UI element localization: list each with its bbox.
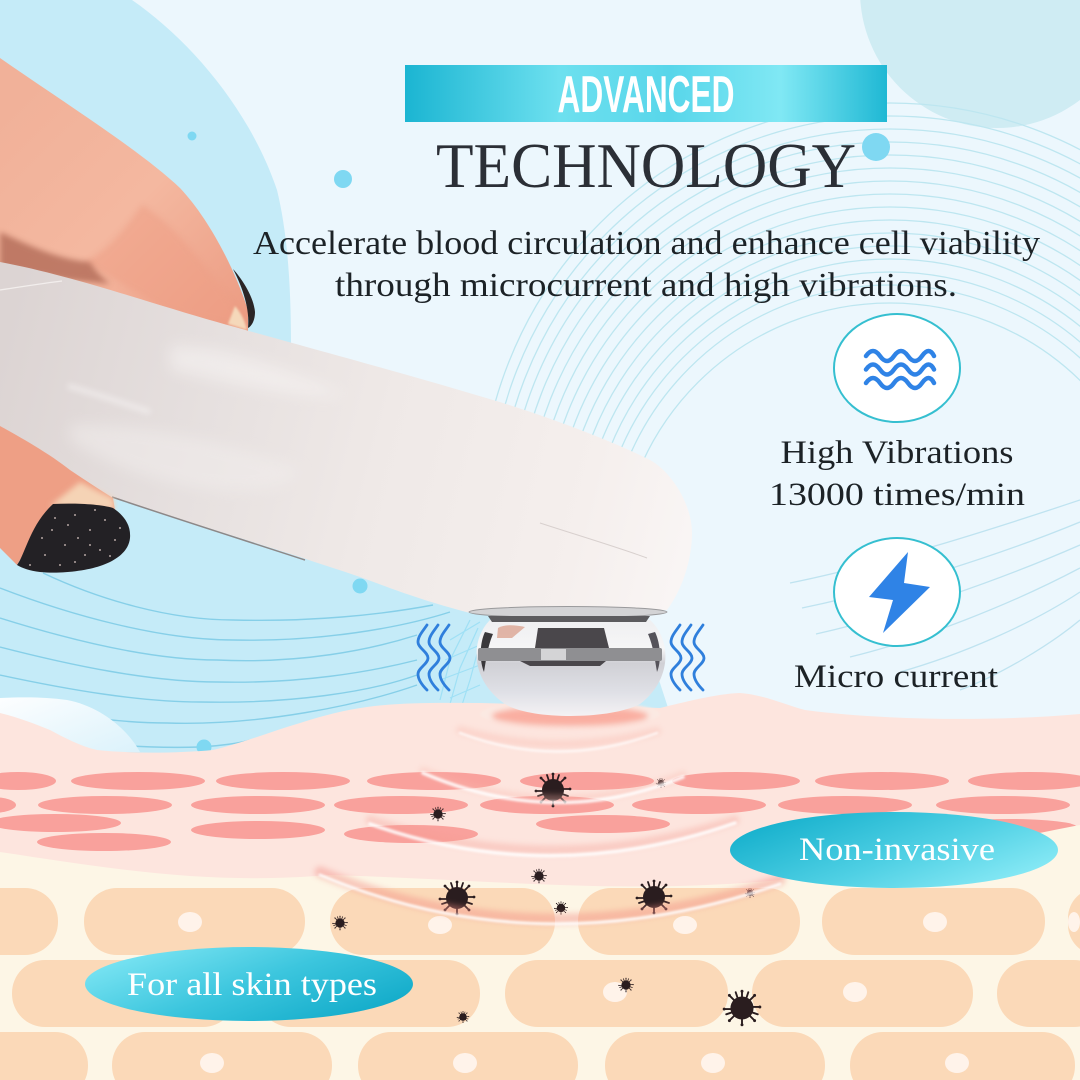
concentric line pattern: upper right [495, 102, 1080, 458]
icon: lightning bolt in circle [834, 538, 960, 646]
icon: left vibration waves [418, 625, 450, 690]
concentric line pattern: lower left [0, 573, 450, 747]
description text [253, 225, 1040, 304]
pill: non-invasive: Non-invasive [799, 832, 995, 868]
viruses [332, 773, 761, 1026]
device edge lines [112, 497, 647, 560]
skin: cell nuclei [178, 912, 1080, 1073]
device: metal head [469, 606, 667, 727]
white patch at left [0, 697, 140, 752]
description text: through microcurrent and high vibrations. [335, 267, 957, 304]
device body highlights [0, 281, 345, 491]
icon: waves in circle [834, 314, 960, 422]
hand: upper nail [233, 269, 255, 328]
background blob: top right circle [860, 0, 1080, 128]
device body [0, 262, 692, 613]
label: high vibrations: High Vibrations [780, 435, 1014, 471]
decorative dots [188, 132, 890, 754]
hand: lower nail with glitter [17, 504, 130, 573]
label: high vibrations: 13000 times/min [769, 477, 1025, 513]
mesh lines near head [440, 620, 480, 705]
hand: upper finger [0, 58, 250, 332]
icon: right vibration waves [671, 625, 704, 690]
pill: for all skin types: For all skin types [127, 967, 377, 1003]
pill: for all skin types [85, 947, 413, 1021]
vibration ripples in skin [320, 730, 780, 924]
heading: technology: TECHNOLOGY [436, 130, 856, 201]
background blob: left light blue [0, 0, 672, 770]
heading bar [405, 65, 887, 124]
skin: epidermis layer [0, 693, 1080, 1080]
concentric line pattern: lower right [790, 500, 1080, 690]
skin: muscle ovals [0, 772, 1080, 851]
hand: lower finger [0, 426, 115, 565]
skin: fat layer [0, 825, 1080, 1080]
hand: finger cuticle [50, 482, 115, 510]
label: micro current: Micro current [794, 659, 998, 695]
skin: fat cells [0, 888, 1080, 1080]
heading bar: ADVANCED [558, 66, 734, 124]
pill: non-invasive [730, 812, 1058, 888]
label: high vibrations [769, 435, 1025, 513]
description text: Accelerate blood circulation and enhance cell viability [253, 225, 1040, 262]
